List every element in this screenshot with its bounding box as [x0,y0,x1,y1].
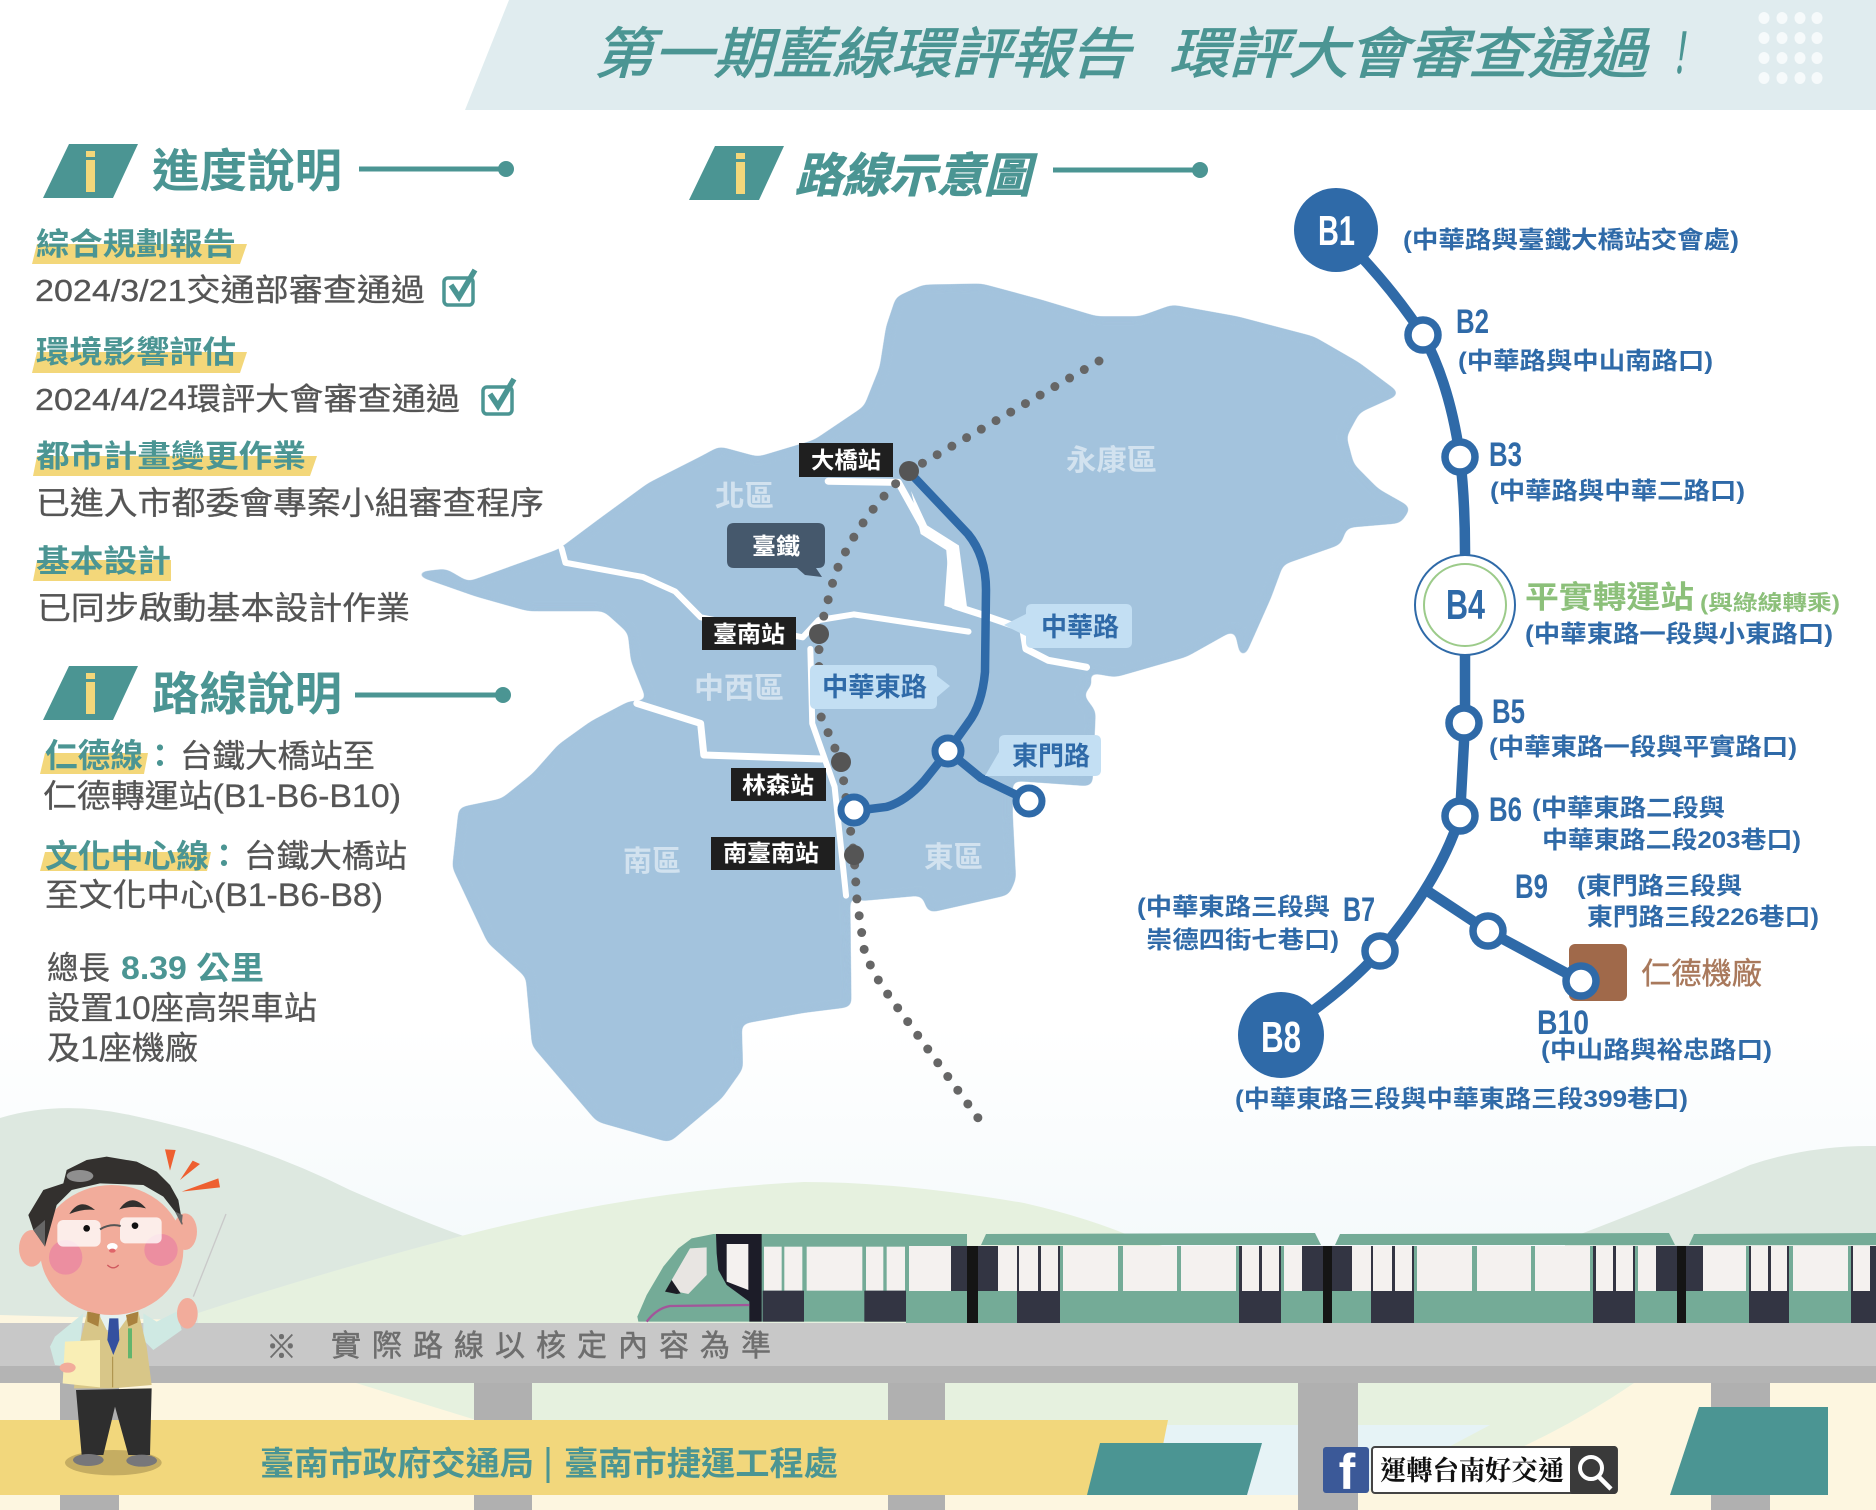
heading: route description: 路線說明 [152,668,342,720]
station B4 [1415,555,1515,655]
station labels: (中華東路二段與 [1532,794,1725,822]
teal block right [1670,1407,1828,1495]
station labels: (中華東路三段與中華東路三段399巷口) [1235,1085,1688,1113]
station labels [1137,226,1840,1113]
route diagram [1137,188,1840,1113]
footer organisation text: 臺南市政府交通局 [260,1445,534,1482]
route description text: 及1座機廠 [47,1030,198,1066]
icon: checkbox [483,379,514,414]
district labels: 東區 [924,841,983,874]
station label: South Tainan: 南臺南站 [723,840,819,866]
station labels: (中華路與中華二路口) [1490,478,1745,505]
progress item: basic design: 基本設計 [36,544,171,579]
callout: Zhonghua East Rd [810,665,950,709]
station label: Tainan: 臺南站 [713,621,785,647]
background hills [0,1108,1876,1510]
progress item: urban plan [33,439,544,521]
station label: Linsen [731,768,826,801]
gap [1677,1246,1686,1323]
route description text: 至文化中心(B1-B6-B8) [45,877,383,913]
station labels: B6 [1489,791,1522,829]
route description text: 總長 [47,950,110,986]
callout: Zhonghua Rd: 中華路 [1041,612,1119,642]
progress item: basic design [33,544,410,626]
district labels [623,444,1157,878]
heading: progress: 進度說明 [152,145,342,197]
footer organisation text: 臺南市捷運工程處 [564,1445,838,1482]
route description text: ： [208,838,240,874]
station labels: B5 [1492,693,1525,731]
station labels: 仁德機廠 [1641,958,1762,991]
route description text: 文化中心線 [45,838,209,874]
station markers [1365,320,1596,996]
station labels: (中華東路一段與小東路口) [1525,620,1833,648]
callout: Zhonghua Rd [1004,604,1132,648]
elevated bridge [0,1323,1876,1510]
route description text: 台鐵大橋站 [244,838,407,874]
heading: route description [43,666,511,720]
heading: route map [689,146,1208,202]
footer organisation text [260,1445,838,1483]
progress item: urban plan: 已進入市都委會專案小組審查程序 [36,485,544,521]
progress item: basic design: 已同步啟動基本設計作業 [37,590,410,626]
title text [594,23,1694,85]
progress item: urban plan: 都市計畫變更作業 [36,439,306,474]
progress item: comprehensive plan: 綜合規劃報告 [36,227,236,262]
station labels: (與綠線轉乘) [1700,592,1840,615]
title text: ！ [1664,23,1694,85]
route description text: ： [144,738,176,774]
yellow footer band [0,1420,1168,1495]
gap [1323,1246,1332,1323]
station labels: (中山路與裕忠路口) [1541,1037,1772,1064]
station labels: (東門路三段與 [1577,872,1742,900]
progress item: EIA: 環境影響評估 [36,335,236,370]
callout: Dongmen Rd: 東門路 [1012,741,1090,771]
route description text: 仁德線 [45,737,143,774]
route description text: 仁德轉運站(B1-B6-B10) [43,778,401,814]
blue line on map [841,477,1042,823]
station label: Tainan [702,617,796,650]
callout: TRA: 臺鐵 [752,533,800,559]
icon: checkbox [444,270,475,305]
station labels: B7 [1343,891,1375,929]
district labels: 南區 [623,845,681,878]
station labels: 東門路三段226巷口) [1587,903,1819,931]
character: presenter [19,1149,226,1475]
station label: South Tainan [711,837,835,870]
facebook search box [1323,1444,1617,1500]
gap [967,1246,978,1323]
note text: ※ [266,1329,297,1365]
heading: route map: 路線示意圖 [795,149,1038,202]
station labels: B3 [1489,436,1522,474]
progress item: EIA [32,335,514,417]
station B8: B8 [1261,1013,1301,1062]
title text: 環評大會審查通過 [1169,23,1650,85]
car 1 rear [906,1246,967,1323]
district labels: 中西區 [694,672,784,705]
car 2 [978,1233,1323,1323]
station B1: B1 [1318,207,1355,254]
station labels: B10 [1537,1004,1589,1042]
train head [637,1234,967,1322]
station labels: (中華路與中山南路口) [1458,348,1713,375]
route description text: 台鐵大橋站至 [180,738,375,774]
station labels: B2 [1456,303,1489,341]
station labels: B9 [1515,868,1548,906]
route description text: 8.39 公里 [121,950,264,986]
station label: Linsen: 林森站 [742,772,814,798]
station labels: (中華東路三段與 [1137,893,1330,921]
station labels: (中華路與臺鐵大橋站交會處) [1403,226,1739,254]
teal block [1087,1443,1262,1495]
title banner [465,0,1876,110]
station B1 [1294,188,1378,272]
facebook search box: 運轉台南好交通 [1380,1456,1564,1486]
train [637,1233,1876,1323]
decorative dot grid [1758,12,1822,84]
depot square [1569,944,1627,1001]
callout: Dongmen Rd [985,735,1101,776]
station labels: 崇德四街七巷口) [1146,927,1339,954]
district labels: 永康區 [1066,444,1157,477]
callout: TRA [727,523,825,577]
railway stations [809,461,919,865]
route description text: 設置10座高架車站 [47,990,317,1026]
district labels: 北區 [715,480,774,513]
facebook search box: f [1339,1444,1356,1500]
callout: Zhonghua East Rd: 中華東路 [822,672,927,702]
title text: 第一期藍線環評報告 [594,23,1134,85]
car 3 [1332,1233,1677,1323]
station labels: 中華東路二段203巷口) [1542,826,1801,854]
progress item: comprehensive plan: 2024/3/21交通部審查通過 [35,273,425,308]
station label: Daqiao [799,443,893,477]
map of Tainan districts [420,286,1407,1140]
car 4 [1686,1233,1876,1323]
station B4: B4 [1446,581,1485,628]
station labels: (中華東路一段與平實路口) [1489,733,1797,761]
progress item: comprehensive plan [32,227,475,308]
route description text [40,737,407,1066]
station B8 [1238,992,1324,1078]
progress item: EIA: 2024/4/24環評大會審查通過 [35,382,460,417]
note text: 實際路線以核定內容為準 [331,1330,771,1363]
station label: Daqiao: 大橋站 [811,447,881,473]
heading: progress [43,144,514,198]
railway dotted line [819,361,1099,1122]
route line [1300,240,1581,1020]
station labels: 平實轉運站 [1525,580,1694,615]
